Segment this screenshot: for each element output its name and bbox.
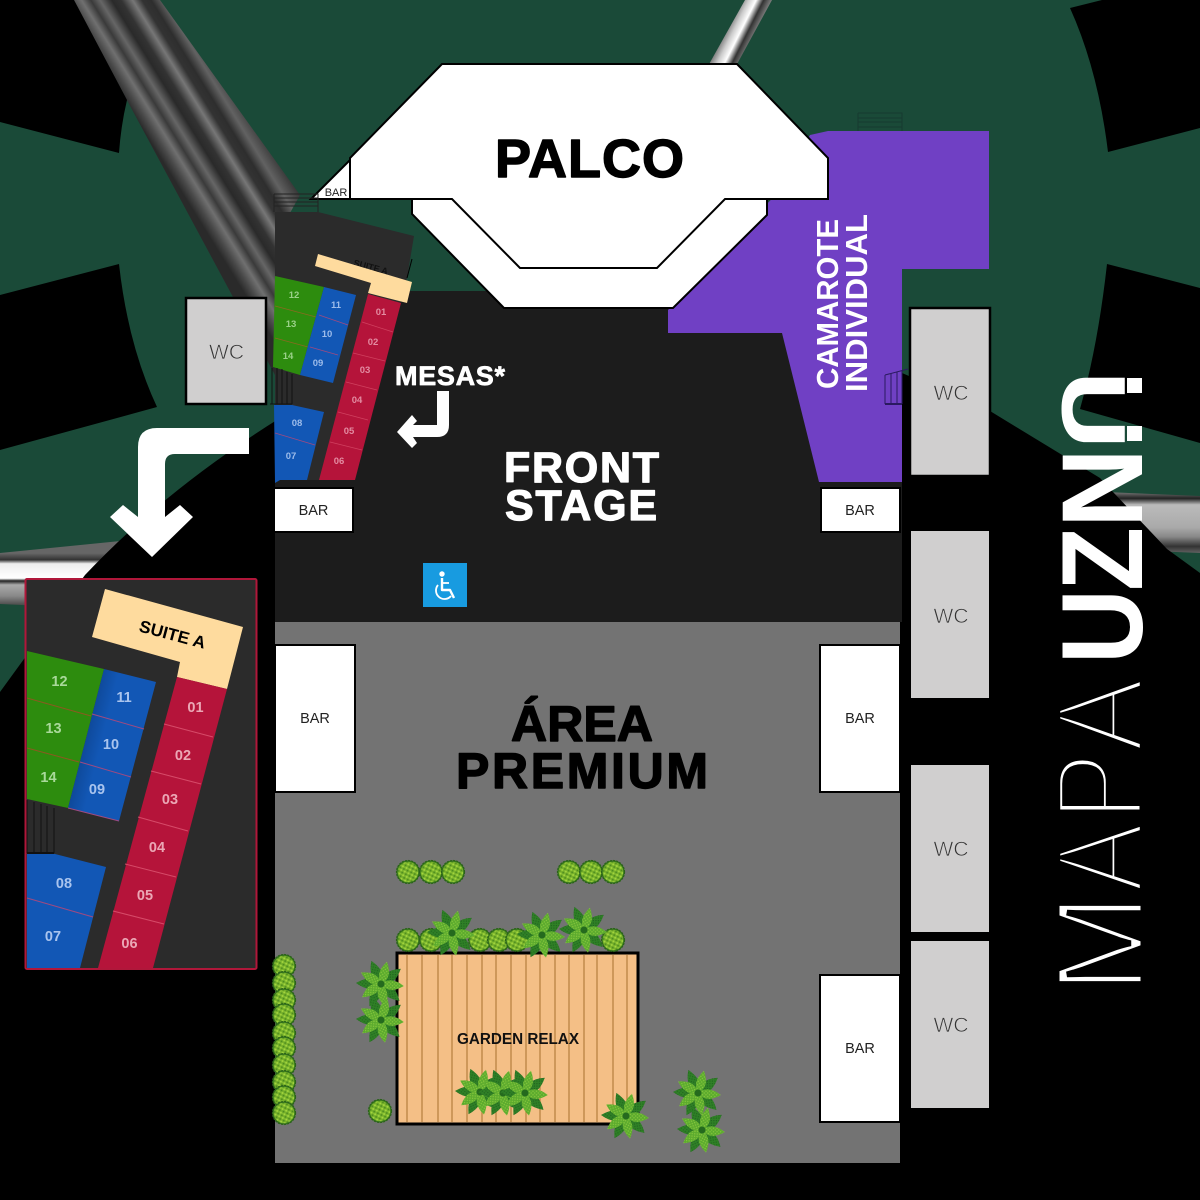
red tables: 01 [376, 307, 387, 318]
red tables: 03 [360, 365, 370, 376]
heading: front stage: STAGE [505, 482, 657, 530]
bar: triangle near stage: BAR [325, 187, 347, 199]
panel: suites inset on map [270, 212, 414, 483]
suite a bar [315, 254, 412, 303]
blue tables 09-11: 10 [103, 737, 119, 753]
blue tables upper: 09 [313, 358, 323, 369]
wc: right 4 [911, 941, 989, 1108]
red tables: 02 [368, 337, 378, 348]
wc: right 2: WC [934, 605, 968, 628]
bar: premium upper right [820, 645, 900, 792]
red tables: 05 [344, 426, 355, 437]
blue tables 07-08: 08 [56, 876, 72, 892]
bar: premium lower right: BAR [845, 1041, 875, 1057]
title: brand name: U [1039, 589, 1167, 664]
title: brand name: N [1039, 448, 1167, 528]
title: mapa: A [1030, 822, 1170, 893]
stairs: suites top [274, 194, 318, 212]
background: metal pipes [0, 0, 1200, 610]
bar: premium upper left: BAR [300, 711, 330, 727]
heading: área premium [456, 696, 708, 799]
blue tables upper [300, 287, 356, 383]
bushes [272, 860, 625, 1125]
wc: left: WC [209, 341, 244, 364]
small suite a text: SUITE A [352, 258, 390, 277]
red tables 01-06: 02 [175, 748, 191, 764]
green tables 12-14: 12 [51, 674, 68, 690]
bar: premium upper left [275, 645, 355, 792]
red tables 01-06: 06 [121, 936, 138, 952]
red tables 01-06: 05 [137, 888, 153, 904]
palco label: PALCO [495, 129, 684, 189]
panel: camarote individual [668, 131, 989, 482]
heading: área premium: ÁREA [511, 696, 653, 752]
blue tables lower: 07 [286, 451, 296, 462]
stairs [27, 800, 54, 853]
green tables: 12 [289, 290, 299, 301]
icon: wheelchair access [423, 563, 467, 607]
camarote label: CAMAROTE [810, 219, 845, 389]
green tables [273, 276, 324, 375]
green tables 12-14 [27, 651, 104, 808]
title: mapa: A [1030, 677, 1170, 753]
title: brand name: U [1044, 372, 1144, 448]
wc: right 1 [910, 308, 990, 476]
garden relax deck [397, 953, 638, 1124]
wc: right 3 [911, 765, 989, 932]
green tables: 14 [283, 351, 294, 362]
wc: left [186, 298, 266, 404]
title: brand name: Z [1039, 527, 1167, 591]
palm trees [356, 905, 725, 1155]
blue tables 09-11: 09 [89, 782, 105, 798]
heading: front stage: FRONT [504, 444, 659, 492]
green tables 12-14: 14 [40, 770, 57, 786]
title: mapa [1030, 677, 1170, 994]
wc: right 1: WC [934, 382, 968, 405]
red tables 01-06: 03 [162, 792, 178, 808]
stage: palco [350, 64, 828, 308]
camarote label [810, 214, 874, 392]
arrow: mesas [397, 391, 449, 448]
bar: front stage right [821, 488, 900, 532]
stairs: camarote side [885, 369, 908, 404]
bar: front stage left [274, 488, 353, 532]
suite a block [92, 589, 243, 689]
title: brand name [1039, 372, 1167, 664]
blue tables 07-08: 07 [45, 929, 61, 945]
wc: right 4: WC [934, 1014, 968, 1037]
green tables: 13 [286, 319, 296, 330]
blue tables lower [274, 405, 324, 483]
blue tables 09-11 [68, 669, 156, 821]
wc: right 3: WC [934, 838, 968, 861]
inner stairs [270, 368, 292, 404]
red tables [319, 294, 401, 480]
red tables 01-06 [98, 677, 227, 968]
suite a block: SUITE A [137, 617, 208, 653]
área premium floor [275, 622, 900, 1163]
blue tables upper: 11 [331, 300, 342, 311]
bar: front stage left: BAR [299, 503, 328, 519]
bar: premium upper right: BAR [845, 711, 875, 727]
blue tables upper: 10 [322, 329, 332, 340]
title: mapa: M [1030, 893, 1170, 994]
heading: área premium: PREMIUM [456, 743, 708, 799]
green tables 12-14: 13 [45, 721, 62, 737]
red tables: 06 [334, 456, 344, 467]
stairs: camarote top [858, 113, 902, 131]
blue tables 09-11: 11 [116, 690, 132, 706]
title: mapa: P [1030, 752, 1170, 821]
front stage floor [275, 291, 902, 622]
bar: triangle near stage [311, 160, 350, 199]
red tables: 04 [352, 395, 363, 406]
bar: front stage right: BAR [845, 503, 875, 519]
wc: right 2 [911, 531, 989, 698]
red tables 01-06: 04 [149, 840, 165, 856]
heading: front stage [504, 444, 659, 530]
bar: premium lower right [820, 975, 900, 1122]
heading: mesas: MESAS* [395, 361, 505, 391]
blue tables lower: 08 [292, 418, 302, 429]
red tables 01-06: 01 [187, 700, 204, 716]
camarote label: INDIVIDUAL [839, 214, 874, 392]
panel: suites detail inset [26, 579, 256, 969]
blue tables 07-08 [27, 854, 106, 968]
arrow: to inset [110, 428, 249, 557]
garden relax label: GARDEN RELAX [457, 1031, 580, 1048]
